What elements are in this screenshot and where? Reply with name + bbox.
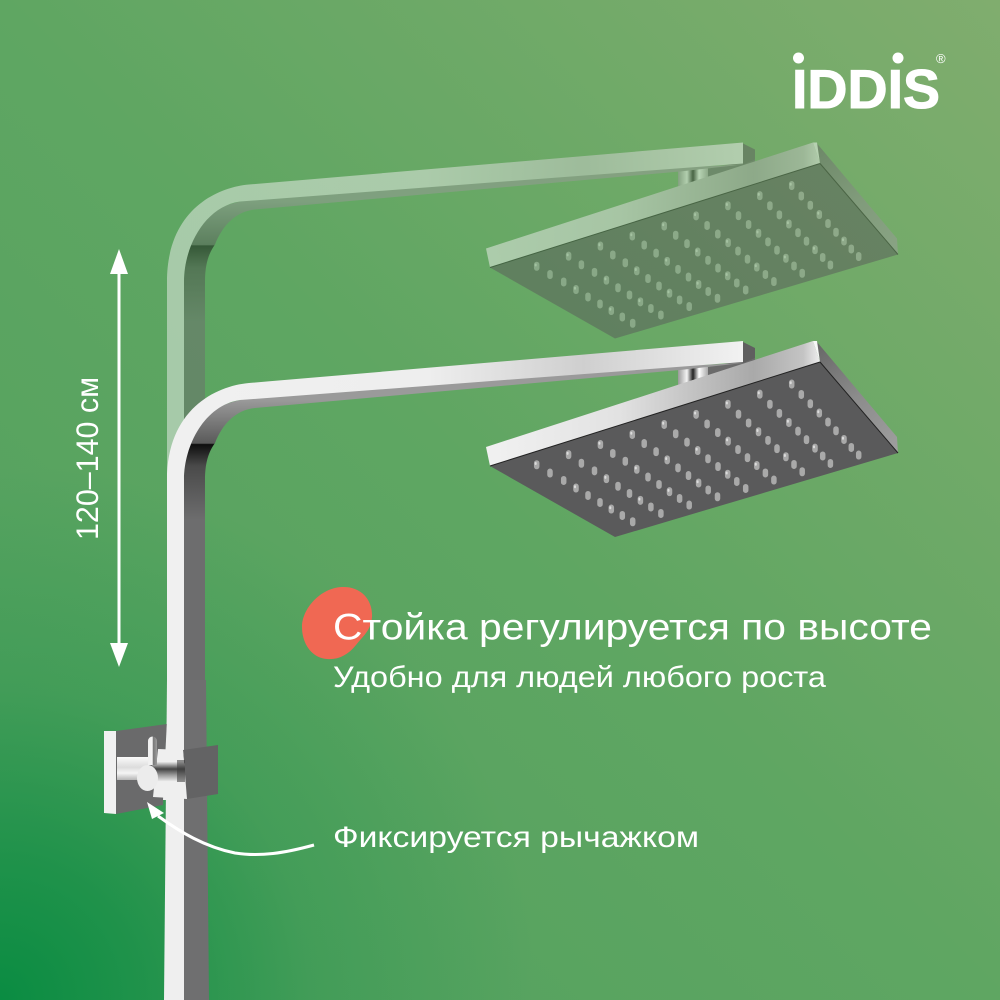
ghost shower rig: raised position	[167, 142, 898, 482]
shower rig: lowered position	[167, 341, 898, 680]
height dimension arrow	[110, 249, 128, 667]
lever caption: Фиксируется рычажком	[333, 821, 699, 854]
height label: 120–140 см	[69, 377, 105, 540]
heading: Стойка регулируется по высоте	[333, 606, 932, 648]
red accent blob	[302, 587, 372, 659]
IDDIS logo: IDDIS	[792, 58, 940, 120]
bracket with locking lever	[104, 720, 218, 814]
subheading: Удобно для людей любого роста	[333, 661, 826, 694]
curved arrow to lever	[147, 802, 314, 855]
IDDIS logo: ®	[936, 51, 946, 66]
sliding post lower section	[164, 680, 209, 1000]
